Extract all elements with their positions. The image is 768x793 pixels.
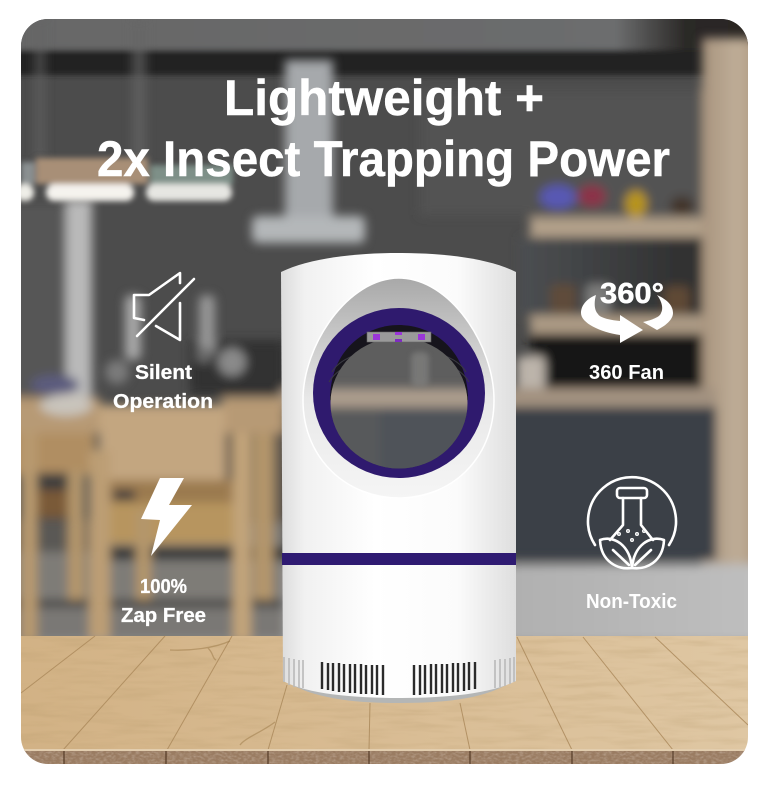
cylinder body [281,253,516,698]
label: Non-Toxic [586,591,677,613]
label [113,362,213,413]
label: Operation [113,391,213,413]
feature: silent operation [113,273,213,413]
feature: 360 fan [581,278,673,384]
icon: muted speaker [134,273,194,340]
base lip [290,678,508,703]
label [121,576,206,627]
title: Lightweight + [224,70,544,126]
feature: zap free [121,478,206,627]
feature: non-toxic [586,477,677,613]
label: Zap Free [121,605,206,627]
title: 2x Insect Trapping Power [97,131,670,187]
title [97,70,670,187]
purple stripe [282,553,516,565]
icon: 360 rotation: 360° [600,278,664,310]
product: mosquito trap [24,253,746,751]
wooden table top [21,636,748,751]
label: 360 Fan [589,362,664,384]
oval recess [303,278,494,498]
lower vents [284,657,514,695]
purple ring [313,308,485,478]
label: 100% [140,576,187,598]
icon: flask with leaves [588,477,676,568]
see-through opening [330,342,468,468]
label: Silent [135,362,192,384]
table front edge [21,749,748,765]
dark grille [329,325,469,420]
UV LED bar [367,332,431,342]
icon: lightning bolt [141,478,192,556]
